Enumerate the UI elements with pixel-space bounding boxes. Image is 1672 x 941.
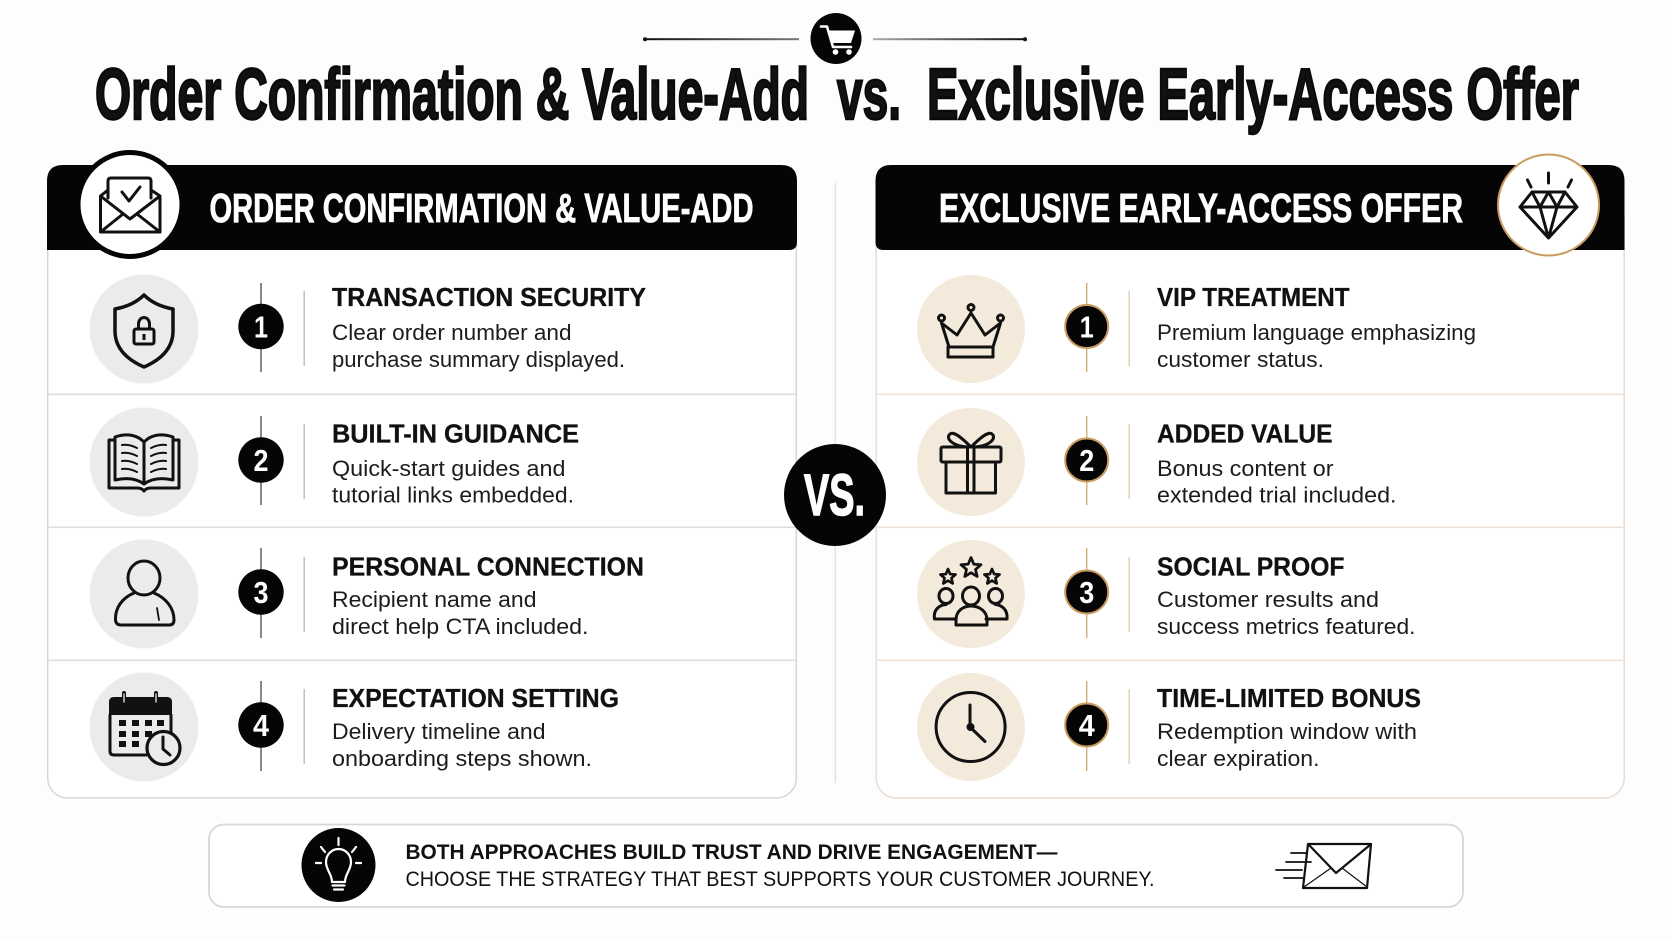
- text: vip treatment: VIP TREATMENT: [1157, 282, 1350, 312]
- text: expectation setting: Delivery timeline and: [332, 719, 546, 744]
- text: personal connection: direct help CTA included.: [332, 614, 588, 639]
- text: built-in guidance: BUILT-IN GUIDANCE: [332, 418, 579, 448]
- number 1: 1: [254, 310, 268, 344]
- panel: exclusive early-access offer: [876, 154, 1624, 798]
- text: personal connection: [332, 552, 644, 639]
- text: expectation setting: [332, 683, 619, 771]
- icon: person: [90, 540, 198, 648]
- text: added value: ADDED VALUE: [1157, 418, 1332, 448]
- text: personal connection: Recipient name and: [332, 587, 536, 612]
- icon: clock: [917, 673, 1025, 781]
- icon: open book: [90, 408, 198, 516]
- icon: crown: [917, 275, 1025, 383]
- text: vip treatment: customer status.: [1157, 347, 1324, 372]
- right panel header: EXCLUSIVE EARLY-ACCESS OFFER: [939, 185, 1463, 231]
- number 1 gold: 1: [1080, 310, 1094, 344]
- top ornament with cart icon: [643, 13, 1027, 64]
- number 2 gold: [1065, 416, 1108, 505]
- number 3 gold: [1065, 548, 1108, 638]
- number 2: [238, 416, 284, 505]
- number 2 gold: 2: [1079, 443, 1094, 478]
- text: social proof: [1157, 552, 1416, 639]
- number 3 gold: 3: [1079, 575, 1094, 610]
- row: vip treatment: [917, 275, 1476, 383]
- text: transaction security: [332, 282, 646, 372]
- icon: gift: [917, 408, 1025, 516]
- row: transaction security: [90, 274, 646, 384]
- icon: light bulb: [302, 828, 376, 902]
- icon: diamond: [1498, 154, 1599, 256]
- right panel header: [876, 165, 1624, 250]
- text: time-limited bonus: Redemption window with: [1157, 719, 1417, 744]
- text: social proof: success metrics featured.: [1157, 614, 1416, 639]
- icon: envelope with check: [78, 152, 182, 256]
- text: expectation setting: onboarding steps shown.: [332, 746, 592, 771]
- title: Order Confirmation & Value-Add: [95, 55, 809, 135]
- text: time-limited bonus: clear expiration.: [1157, 746, 1320, 771]
- number 3: 3: [254, 575, 268, 610]
- text: expectation setting: EXPECTATION SETTING: [332, 683, 619, 713]
- row: social proof: [917, 540, 1416, 648]
- footer text: BOTH APPROACHES BUILD TRUST AND DRIVE ENGAGEMENT—: [406, 840, 1058, 864]
- number 3: [238, 548, 284, 638]
- vs badge: [784, 444, 886, 546]
- text: transaction security: purchase summary displayed.: [332, 347, 625, 372]
- number 1 gold: [1065, 283, 1108, 372]
- text: vip treatment: Premium language emphasizing: [1157, 320, 1476, 345]
- number 4: 4: [253, 708, 270, 743]
- number 2: 2: [254, 443, 268, 478]
- text: social proof: Customer results and: [1157, 587, 1379, 612]
- footer text: [406, 840, 1154, 891]
- row: expectation setting: [90, 672, 619, 782]
- text: built-in guidance: tutorial links embedded.: [332, 482, 574, 508]
- text: social proof: SOCIAL PROOF: [1157, 552, 1344, 582]
- number 1: [238, 283, 284, 372]
- row: built-in guidance: [90, 408, 579, 516]
- text: built-in guidance: [332, 418, 579, 508]
- text: personal connection: PERSONAL CONNECTION: [332, 552, 644, 582]
- number 4 gold: 4: [1079, 708, 1095, 743]
- footer text: CHOOSE THE STRATEGY THAT BEST SUPPORTS YOUR CUSTOMER JOURNEY.: [406, 867, 1154, 891]
- panel: order confirmation and value-add: [47, 152, 797, 798]
- icon: stars and people: [917, 540, 1025, 648]
- row: added value: [917, 408, 1396, 516]
- title: vs.: [837, 55, 901, 135]
- icon: shield with lock: [90, 274, 198, 384]
- text: time-limited bonus: [1157, 683, 1421, 771]
- row: time-limited bonus: [917, 673, 1421, 781]
- number 4 gold: [1065, 681, 1108, 771]
- icon: calendar with clock: [90, 672, 198, 782]
- text: transaction security: Clear order number and: [332, 320, 572, 345]
- text: vip treatment: [1157, 282, 1476, 372]
- text: time-limited bonus: TIME-LIMITED BONUS: [1157, 683, 1421, 713]
- left panel header: ORDER CONFIRMATION & VALUE-ADD: [210, 185, 754, 231]
- vs badge: VS.: [804, 463, 865, 528]
- footer callout: [209, 824, 1463, 907]
- text: built-in guidance: Quick-start guides and: [332, 456, 566, 481]
- number 4: [238, 681, 284, 771]
- text: added value: Bonus content or: [1157, 456, 1334, 481]
- text: added value: [1157, 418, 1396, 508]
- row: personal connection: [90, 540, 644, 648]
- text: added value: extended trial included.: [1157, 482, 1396, 508]
- icon: flying envelope: [1276, 844, 1371, 888]
- left panel header: [47, 165, 797, 250]
- text: transaction security: TRANSACTION SECURITY: [332, 282, 646, 312]
